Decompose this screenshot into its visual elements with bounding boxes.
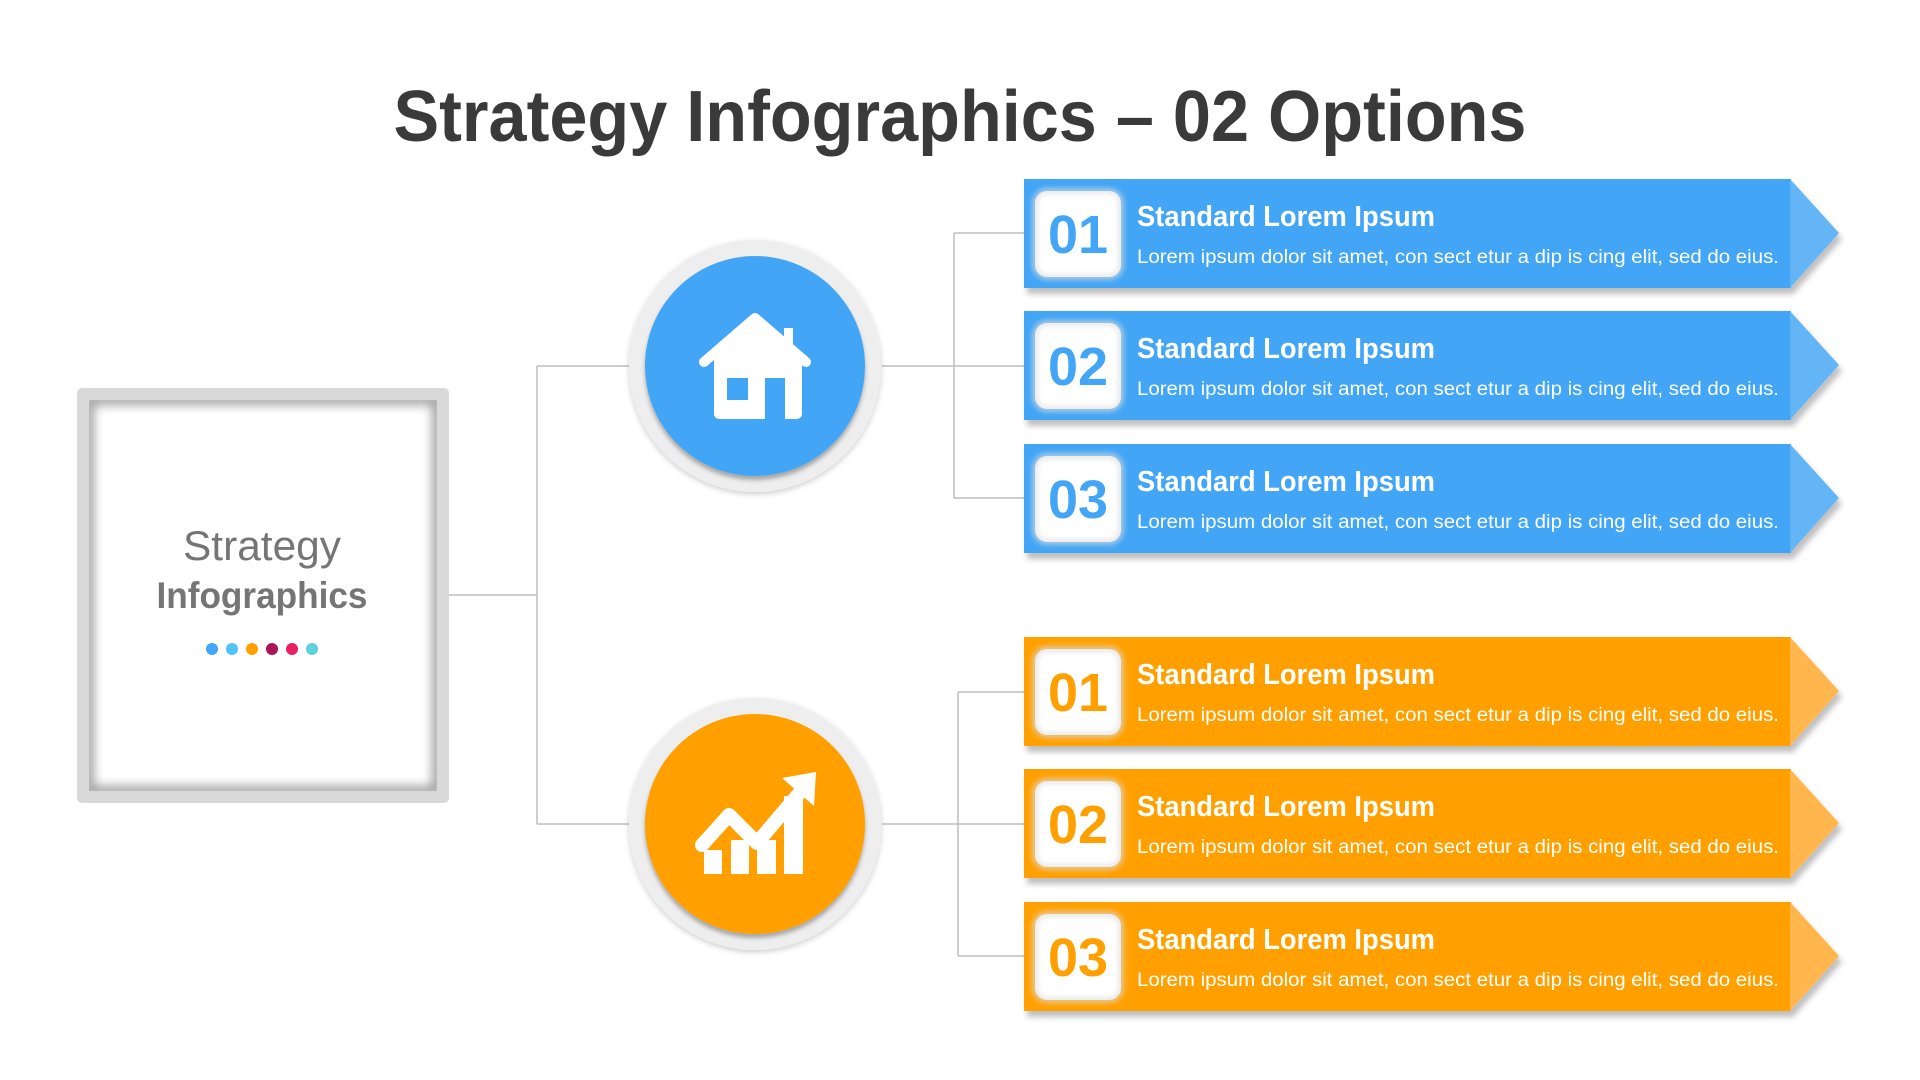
orange option 02: 02 [1048,795,1108,855]
orange option 03 [1024,902,1839,1011]
blue option 02: 02 [1048,337,1108,397]
blue option 03: 03 [1048,470,1108,530]
box heading: Strategy [183,522,341,569]
blue option 01: 01 [1048,205,1108,265]
orange option 01: 01 [1048,663,1108,723]
orange option 01: Standard Lorem Ipsum [1137,659,1435,691]
orange option 03: Standard Lorem Ipsum [1137,924,1435,956]
orange option 01 [1024,637,1839,746]
blue option 02 [1024,311,1839,420]
blue option 02: Standard Lorem Ipsum [1137,333,1435,365]
blue option 02: Lorem ipsum dolor sit amet, con sect etur a dip is cing elit, sed do eius. [1137,379,1779,400]
orange option 02: Lorem ipsum dolor sit amet, con sect etur a dip is cing elit, sed do eius. [1137,837,1779,858]
panel: central box [77,388,449,803]
blue option 03: Lorem ipsum dolor sit amet, con sect etur a dip is cing elit, sed do eius. [1137,512,1779,533]
icon: house circle [629,240,881,492]
blue option 03 [1024,444,1839,553]
blue option 01 [1024,179,1839,288]
blue option 01: Lorem ipsum dolor sit amet, con sect etur a dip is cing elit, sed do eius. [1137,247,1779,268]
orange option 02 [1024,769,1839,878]
panel: central box: Infographics [156,575,368,616]
orange option 03: 03 [1048,928,1108,988]
title: Strategy Infographics – 02 Options [394,77,1526,157]
panel: orange options [1024,637,1839,1011]
orange option 01: Lorem ipsum dolor sit amet, con sect etur a dip is cing elit, sed do eius. [1137,705,1779,726]
orange option 03: Lorem ipsum dolor sit amet, con sect etur a dip is cing elit, sed do eius. [1137,970,1779,991]
icon: chart circle [629,698,881,950]
orange option 02: Standard Lorem Ipsum [1137,791,1435,823]
connector lines [449,233,1024,956]
panel: blue options [1024,179,1839,553]
blue option 01: Standard Lorem Ipsum [1137,201,1435,233]
color dots [206,643,318,655]
blue option 03: Standard Lorem Ipsum [1137,466,1435,498]
